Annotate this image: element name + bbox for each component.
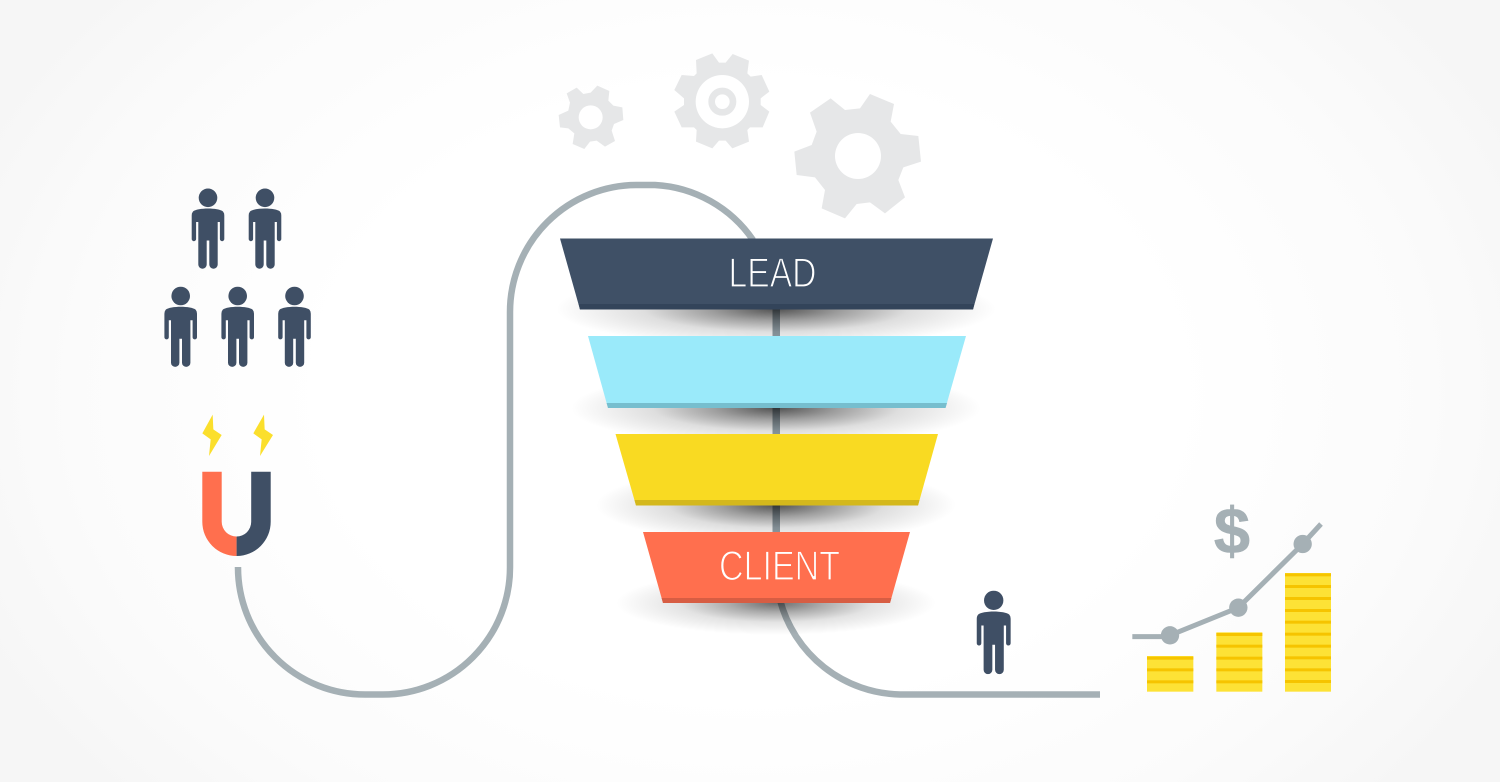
icon: lightning bolts <box>202 415 273 456</box>
funnel layer: blue <box>588 336 966 408</box>
icon: person <box>249 188 281 269</box>
icon: dollar sign: $ <box>1214 494 1250 567</box>
bar: small coin stack <box>1147 656 1193 692</box>
icon: large gear <box>794 94 921 218</box>
bar: medium coin stack <box>1216 632 1262 692</box>
icon: person <box>221 287 254 367</box>
icon: client person <box>977 591 1011 674</box>
icon: person <box>278 287 311 367</box>
icon: person <box>192 188 224 269</box>
icon: small gear <box>559 86 623 149</box>
icon: person <box>164 287 197 367</box>
icon: magnet <box>202 472 271 556</box>
label: lead: LEAD <box>728 249 816 296</box>
funnel shadows <box>556 271 996 635</box>
connector: path from magnet through the funnel top <box>238 185 753 694</box>
connector: path from funnel to revenue <box>780 600 1100 694</box>
funnel layer: lead <box>560 238 993 310</box>
connector: funnel centre line <box>772 305 780 535</box>
funnel layer: client <box>643 532 910 603</box>
icon: medium gear <box>674 53 769 148</box>
funnel layer: yellow <box>616 434 938 506</box>
revenue chart <box>1132 524 1331 692</box>
gears <box>559 53 921 218</box>
people group <box>164 188 311 367</box>
label: client: CLIENT <box>719 542 840 589</box>
bar: large coin stack <box>1285 573 1331 692</box>
line chart <box>1132 524 1321 644</box>
